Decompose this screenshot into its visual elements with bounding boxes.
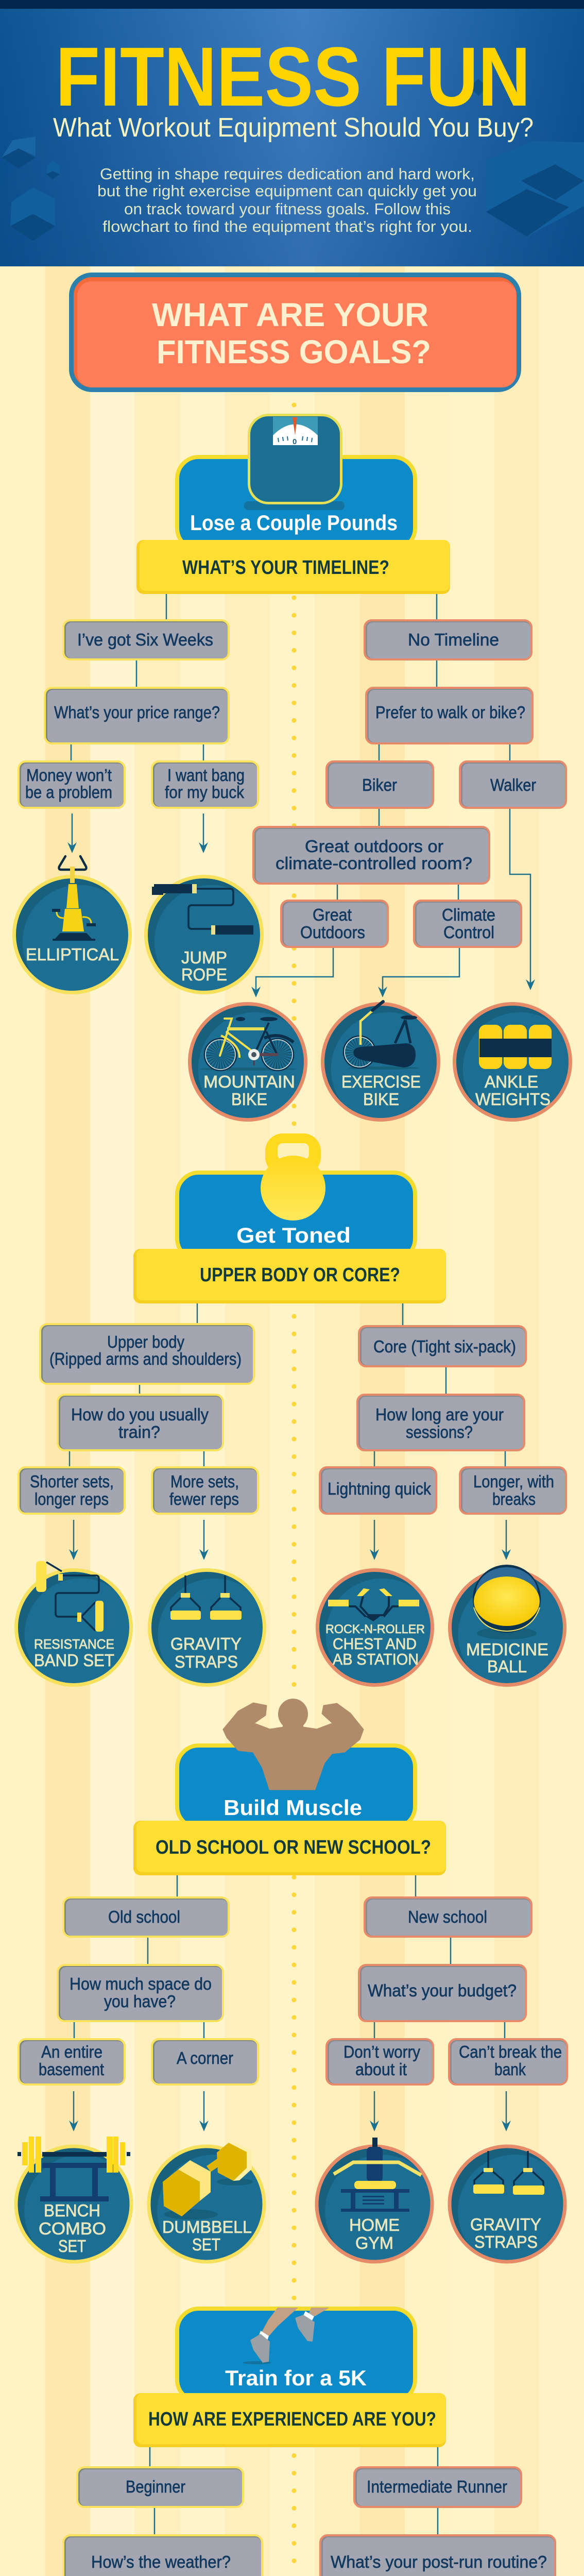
box: biker: Biker xyxy=(362,775,397,794)
result: home gym xyxy=(317,2138,432,2262)
box: new school: New school xyxy=(408,1907,487,1926)
result: medicine ball: MEDICINE xyxy=(466,1640,548,1659)
icon: bathroom scale xyxy=(249,415,341,503)
box: don't worry: Don’t worry xyxy=(343,2042,420,2061)
decorative cubes xyxy=(2,59,584,241)
result: rock-n-roller chest and ab station: ROCK-N-ROLLER xyxy=(325,1622,425,1636)
result: gravity straps: STRAPS xyxy=(175,1652,238,1671)
panel: what are your fitness goals: FITNESS GOALS? xyxy=(157,333,431,370)
question bar: upper body or core xyxy=(133,1249,446,1303)
section: get toned xyxy=(16,1133,566,1685)
subtitle: What Workout Equipment Should You Buy? xyxy=(53,113,534,143)
arrow: to bench combo set xyxy=(69,2091,78,2131)
result: mountain bike xyxy=(190,1004,306,1120)
result: dumbbell set: SET xyxy=(192,2235,220,2254)
arrow: bang to jump rope xyxy=(199,814,208,853)
result: gravity straps xyxy=(149,1570,265,1685)
connector lines xyxy=(83,2447,505,2576)
box: old school: Old school xyxy=(108,1907,180,1926)
box: upper body xyxy=(40,1324,254,1384)
result: exercise bike: BIKE xyxy=(363,1090,399,1109)
box: upper body: Upper body xyxy=(107,1332,184,1351)
box: lightning quick: Lightning quick xyxy=(328,1479,431,1498)
panel: what are your fitness goals xyxy=(71,275,519,389)
box: money: Money won’t xyxy=(26,766,112,785)
result: gravity straps 2 xyxy=(450,2146,565,2262)
box: how much space xyxy=(58,1965,223,2021)
connector lines xyxy=(74,1875,505,2038)
box: outdoors or climate: climate-controlled room? xyxy=(276,854,472,873)
box: biker xyxy=(327,761,433,808)
box: walk or bike: Prefer to walk or bike? xyxy=(375,703,525,722)
header: train for a 5k: Train for a 5K xyxy=(225,2366,367,2390)
box: beginner: Beginner xyxy=(126,2477,185,2496)
header: build muscle xyxy=(177,1699,415,1828)
connector lines xyxy=(71,594,510,900)
box: walker xyxy=(460,761,566,808)
intro paragraph xyxy=(97,165,477,235)
header: get toned: Get Toned xyxy=(236,1223,351,1247)
box: more sets: More sets, xyxy=(170,1472,239,1491)
section: build muscle xyxy=(16,1699,567,2262)
result: mountain bike: MOUNTAIN xyxy=(203,1072,295,1091)
arrow: to medicine ball xyxy=(502,1520,511,1560)
arrow: to home gym xyxy=(370,2091,379,2131)
arrow: to resistance band set xyxy=(69,1520,78,1560)
question bar: how experienced xyxy=(133,2393,446,2447)
box: money: be a problem xyxy=(25,783,112,802)
box: can't break the bank: bank xyxy=(494,2060,526,2079)
arrow: to dumbbell set xyxy=(199,2091,209,2131)
result: elliptical xyxy=(14,856,130,992)
box: entire basement: basement xyxy=(39,2060,104,2079)
box: how's the weather: How’s the weather? xyxy=(91,2552,231,2571)
header: train for a 5k xyxy=(177,2308,415,2401)
question bar: old school or new school: OLD SCHOOL OR NEW SCHOOL? xyxy=(156,1837,431,1858)
box: no timeline xyxy=(365,620,531,659)
box: longer with breaks: breaks xyxy=(492,1489,536,1509)
box: upper body: (Ripped arms and shoulders) xyxy=(49,1349,242,1368)
panel: title banner xyxy=(0,0,584,266)
box: six weeks xyxy=(63,620,229,659)
section: train for a 5k xyxy=(14,2308,565,2576)
intro paragraph: but the right exercise equipment can quickly get you xyxy=(97,182,477,200)
box: new school xyxy=(365,1897,531,1937)
arrow: walker to ankle weights xyxy=(510,809,535,990)
box: outdoors or climate: Great outdoors or xyxy=(305,837,443,856)
box: how do you train xyxy=(58,1395,223,1450)
arrow: outdoors to mountain bike xyxy=(251,948,333,997)
box: a corner: A corner xyxy=(177,2048,233,2067)
arrow: climate to exercise bike xyxy=(378,948,459,997)
box: shorter sets: Shorter sets, xyxy=(30,1472,114,1491)
header: lose a couple pounds xyxy=(177,415,415,550)
box: money xyxy=(19,761,125,808)
box: great outdoors: Outdoors xyxy=(300,923,365,942)
header: get toned xyxy=(177,1133,415,1260)
box: outdoors or climate xyxy=(253,827,489,884)
box: core: Core (Tight six-pack) xyxy=(373,1337,516,1356)
intro paragraph: on track toward your fitness goals. Follow this xyxy=(124,200,451,218)
box: climate control: Control xyxy=(443,923,494,942)
box: bang for buck: I want bang xyxy=(167,766,245,785)
box: shorter sets xyxy=(19,1467,125,1514)
result: dumbbell set xyxy=(149,2140,264,2262)
result: rock-n-roller chest and ab station: AB STATION xyxy=(333,1650,419,1668)
result: gravity straps 2: STRAPS xyxy=(474,2232,538,2251)
box: six weeks: I’ve got Six Weeks xyxy=(77,630,213,649)
intro paragraph: Getting in shape requires dedication and hard work, xyxy=(100,165,475,183)
box: don't worry xyxy=(327,2039,433,2084)
result: ankle weights xyxy=(454,1004,571,1120)
box: no timeline: No Timeline xyxy=(408,630,499,649)
question bar: what's your timeline: WHAT’S YOUR TIMELINE? xyxy=(182,557,389,579)
result: rock-n-roller chest and ab station: CHEST AND xyxy=(333,1635,417,1653)
header: build muscle: Build Muscle xyxy=(224,1795,362,1820)
box: shorter sets: longer reps xyxy=(35,1489,109,1509)
box: walk or bike xyxy=(366,688,533,743)
box: bang for buck xyxy=(152,761,258,808)
arrow: to gravity straps xyxy=(502,2091,511,2131)
box: intermediate runner xyxy=(354,2467,521,2507)
result: resistance band set: BAND SET xyxy=(34,1651,114,1670)
result: bench combo set xyxy=(16,2137,131,2262)
result: home gym: GYM xyxy=(355,2233,393,2252)
box: old school xyxy=(63,1897,229,1937)
box: lightning quick xyxy=(320,1467,436,1514)
icon: running legs xyxy=(243,2308,330,2364)
box: what's your budget: What’s your budget? xyxy=(368,1981,517,2000)
question bar: what's your timeline xyxy=(136,540,450,594)
result: gravity straps 2: GRAVITY xyxy=(470,2215,541,2234)
result: mountain bike: BIKE xyxy=(231,1090,267,1109)
box: how long sessions: sessions? xyxy=(406,1422,473,1442)
result: home gym: HOME xyxy=(349,2215,400,2234)
box: bang for buck: for my buck xyxy=(165,783,244,802)
icon: flexing bodybuilder xyxy=(224,1699,363,1789)
result: jump rope: JUMP xyxy=(181,948,227,967)
result: jump rope: ROPE xyxy=(181,965,227,984)
result: medicine ball xyxy=(450,1565,564,1685)
box: great outdoors: Great xyxy=(313,905,352,924)
box: intermediate runner: Intermediate Runner xyxy=(367,2477,507,2496)
result: gravity straps: GRAVITY xyxy=(170,1634,242,1653)
icon: bathroom scale: 0 xyxy=(293,437,297,446)
box: price range xyxy=(45,688,229,743)
box: beginner xyxy=(77,2467,243,2507)
box: how's the weather xyxy=(63,2535,262,2576)
box: don't worry: about it xyxy=(355,2060,407,2079)
result: bench combo set: COMBO xyxy=(39,2219,106,2238)
result: exercise bike xyxy=(322,1002,439,1120)
box: how long sessions: How long are your xyxy=(375,1405,504,1424)
result: dumbbell set: DUMBBELL xyxy=(162,2217,252,2236)
result: medicine ball: BALL xyxy=(487,1657,527,1676)
dotted center line xyxy=(291,405,297,2576)
box: climate control xyxy=(414,901,521,947)
arrow: to rock-n-roller xyxy=(370,1520,379,1560)
connector lines xyxy=(70,1303,505,1467)
box: how do you train: How do you usually xyxy=(71,1405,209,1424)
box: what's your budget xyxy=(359,1965,526,2021)
box: great outdoors xyxy=(281,901,388,947)
box: more sets: fewer reps xyxy=(169,1489,239,1509)
box: walker: Walker xyxy=(490,775,536,794)
box: more sets xyxy=(152,1467,258,1514)
icon: kettlebell xyxy=(261,1133,325,1221)
box: post-run routine: What’s your post-run routine? xyxy=(331,2552,547,2571)
box: entire basement xyxy=(19,2039,125,2084)
box: climate control: Climate xyxy=(442,905,495,924)
box: entire basement: An entire xyxy=(41,2042,102,2061)
panel: what are your fitness goals: WHAT ARE YOUR xyxy=(152,296,428,333)
result: exercise bike: EXERCISE xyxy=(341,1072,421,1091)
result: elliptical: ELLIPTICAL xyxy=(26,945,119,964)
result: bench combo set: SET xyxy=(58,2236,86,2256)
section: lose a couple pounds xyxy=(14,415,571,1120)
box: how much space: you have? xyxy=(104,1992,176,2011)
result: resistance band set xyxy=(16,1561,131,1685)
question bar: old school or new school xyxy=(133,1821,446,1875)
arrow: money to elliptical xyxy=(67,814,77,853)
question bar: how experienced: HOW ARE EXPERIENCED ARE YOU? xyxy=(148,2409,436,2430)
box: price range: What’s your price range? xyxy=(54,703,220,722)
result: bench combo set: BENCH xyxy=(44,2201,100,2220)
question bar: upper body or core: UPPER BODY OR CORE? xyxy=(200,1264,400,1286)
result: rock-n-roller chest and ab station xyxy=(317,1570,433,1685)
box: can't break the bank xyxy=(449,2039,567,2084)
arrow: to gravity straps xyxy=(199,1520,209,1560)
box: can't break the bank: Can’t break the xyxy=(459,2042,562,2061)
box: longer with breaks xyxy=(460,1467,566,1514)
box: how much space: How much space do xyxy=(70,1974,212,1993)
box: how long sessions xyxy=(357,1395,524,1450)
box: a corner xyxy=(152,2039,258,2084)
result: ankle weights: WEIGHTS xyxy=(475,1090,551,1109)
result: resistance band set: RESISTANCE xyxy=(34,1636,114,1652)
result: jump rope xyxy=(146,877,262,992)
header: lose a couple pounds: Lose a Couple Pounds xyxy=(190,511,398,535)
box: core xyxy=(359,1326,526,1366)
box: how do you train: train? xyxy=(118,1422,160,1442)
box: longer with breaks: Longer, with xyxy=(473,1472,554,1491)
intro paragraph: flowchart to find the equipment that’s right for you. xyxy=(102,217,472,235)
box: post-run routine xyxy=(320,2535,555,2576)
result: ankle weights: ANKLE xyxy=(485,1072,538,1091)
